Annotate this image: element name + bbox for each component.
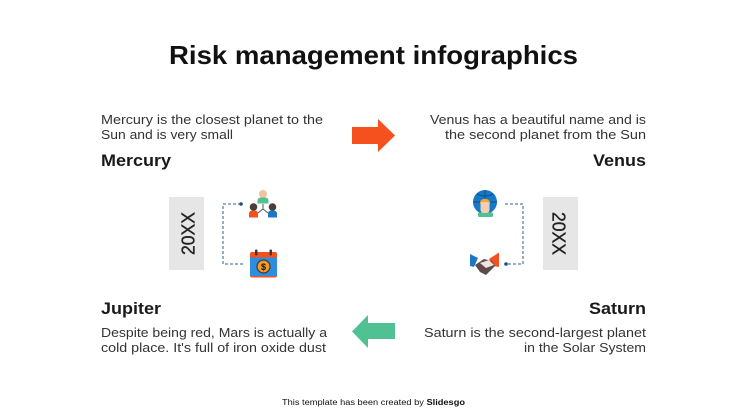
arrow: green left: [352, 315, 395, 348]
footer credit: This template has been created by Slidesgo: [282, 398, 465, 407]
text: Mercury description: [101, 112, 323, 142]
date box: left: [169, 197, 204, 270]
text: Saturn description: in the Solar System: [524, 340, 646, 355]
connector: right: [504, 204, 523, 266]
connector: left: [223, 202, 243, 264]
heading: Mercury: Mercury: [101, 151, 172, 170]
text: Saturn description: Saturn is the second-largest planet: [424, 325, 646, 340]
date box: left: 20XX: [178, 212, 198, 255]
icon: handshake: [470, 252, 499, 275]
icon: calendar with coin: [250, 250, 277, 278]
heading: Saturn: Saturn: [589, 299, 646, 318]
text: Venus description: [430, 112, 647, 142]
icon: globe with person: [473, 190, 497, 217]
panel: Mercury: [101, 112, 323, 170]
panel: Saturn: [424, 299, 646, 355]
panel: Jupiter: [101, 299, 328, 355]
heading: Venus: Venus: [593, 151, 646, 170]
date box: right: [543, 197, 578, 270]
panel: Venus: [430, 112, 647, 170]
date box: right: 20XX: [548, 212, 568, 255]
text: Jupiter description: Despite being red, Mars is actually a: [101, 325, 328, 340]
text: Venus description: the second planet from the Sun: [445, 127, 646, 142]
arrow: orange right: [352, 119, 395, 152]
text: Mercury description: Mercury is the closest planet to the: [101, 112, 323, 127]
icon: calendar with coin: $: [261, 262, 266, 272]
heading: Jupiter: Jupiter: [101, 299, 161, 318]
icon: team: [249, 190, 277, 218]
text: Mercury description: Sun and is very small: [101, 127, 233, 142]
text: Jupiter description: [101, 325, 328, 355]
text: Saturn description: [424, 325, 646, 355]
text: Venus description: Venus has a beautiful name and is: [430, 112, 647, 127]
text: Jupiter description: cold place. It's full of iron oxide dust: [101, 340, 326, 355]
title: Risk management infographics: [169, 40, 578, 70]
